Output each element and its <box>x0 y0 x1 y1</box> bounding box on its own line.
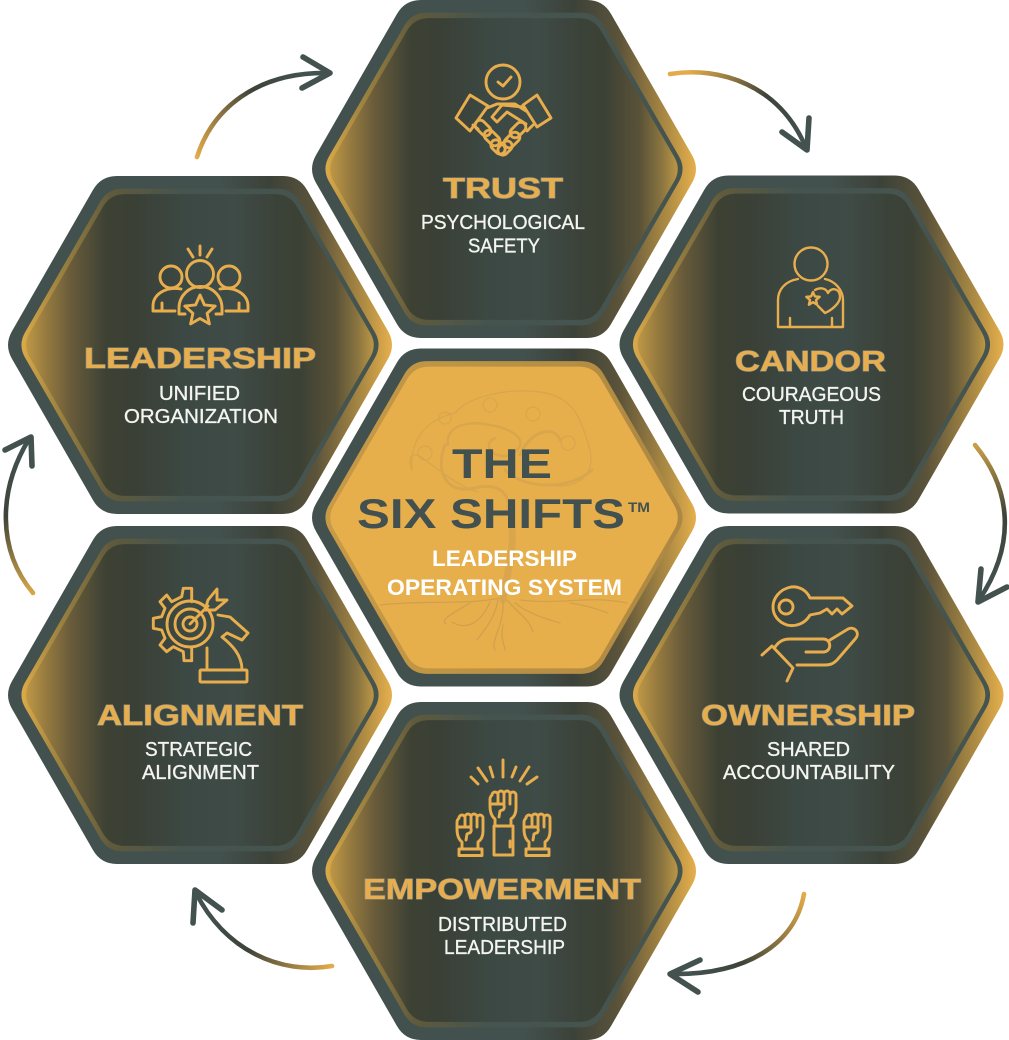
subtitle: leadership operating system: OPERATING SYSTEM <box>387 575 622 600</box>
arrow: alignment to leadership <box>5 437 33 593</box>
icon: person with heart and star <box>778 248 843 327</box>
heading: empowerment: EMPOWERMENT <box>363 874 641 906</box>
description: psychological safety: SAFETY <box>468 236 540 258</box>
panel: trust <box>312 0 696 338</box>
icon: raised fists <box>457 760 550 856</box>
description: psychological safety: PSYCHOLOGICAL <box>421 212 585 234</box>
alignment hexagon <box>8 526 392 864</box>
panel: leadership <box>8 176 392 514</box>
candor hexagon <box>620 176 1004 514</box>
arrow: empowerment to alignment <box>193 890 332 968</box>
panel: candor <box>620 176 1004 514</box>
center hexagon <box>312 348 696 686</box>
heading: ownership: OWNERSHIP <box>701 700 915 732</box>
icon: handshake with check <box>456 65 551 157</box>
description: shared accountability <box>723 739 895 784</box>
icon: gear target and chess knight <box>153 588 248 682</box>
description: strategic alignment: STRATEGIC <box>145 739 252 761</box>
description: strategic alignment <box>142 739 259 784</box>
subtitle: leadership operating system: LEADERSHIP <box>432 546 577 571</box>
ownership hexagon <box>620 526 1004 864</box>
leadership hexagon <box>8 176 392 514</box>
arrow: leadership to trust <box>197 57 330 157</box>
description: unified organization <box>124 383 278 428</box>
panel: alignment <box>8 526 392 864</box>
description: courageous truth <box>742 384 881 429</box>
title: the six shifts <box>357 440 650 537</box>
title: the six shifts: THE <box>452 440 552 487</box>
description: shared accountability: ACCOUNTABILITY <box>723 762 895 784</box>
title: the six shifts: SIX SHIFTS <box>357 490 625 537</box>
description: unified organization: UNIFIED <box>159 383 240 405</box>
panel: ownership <box>620 526 1004 864</box>
arrow: candor to ownership <box>975 445 1007 602</box>
arrow: ownership to empowerment <box>670 894 804 992</box>
icon: key over open hand <box>762 587 857 681</box>
icon: team with star <box>153 246 248 324</box>
description: distributed leadership: LEADERSHIP <box>444 937 565 959</box>
description: distributed leadership <box>438 914 567 959</box>
description: psychological safety <box>421 212 585 258</box>
heading: alignment: ALIGNMENT <box>97 700 303 732</box>
description: distributed leadership: DISTRIBUTED <box>438 914 567 936</box>
arrow: trust to candor <box>670 72 809 150</box>
description: shared accountability: SHARED <box>767 739 850 761</box>
description: strategic alignment: ALIGNMENT <box>142 762 259 784</box>
description: unified organization: ORGANIZATION <box>124 406 278 428</box>
subtitle: leadership operating system <box>387 546 622 600</box>
heading: trust: TRUST <box>443 173 563 205</box>
empowerment hexagon <box>312 702 696 1040</box>
heading: candor: CANDOR <box>735 346 886 378</box>
trust hexagon <box>312 0 696 338</box>
panel: center the six shifts <box>312 348 696 686</box>
tree watermark <box>380 391 627 650</box>
panel: empowerment <box>312 702 696 1040</box>
heading: leadership: LEADERSHIP <box>84 343 316 375</box>
description: courageous truth: COURAGEOUS <box>742 384 881 406</box>
description: courageous truth: TRUTH <box>779 407 844 429</box>
title: the six shifts: TM <box>628 499 650 515</box>
